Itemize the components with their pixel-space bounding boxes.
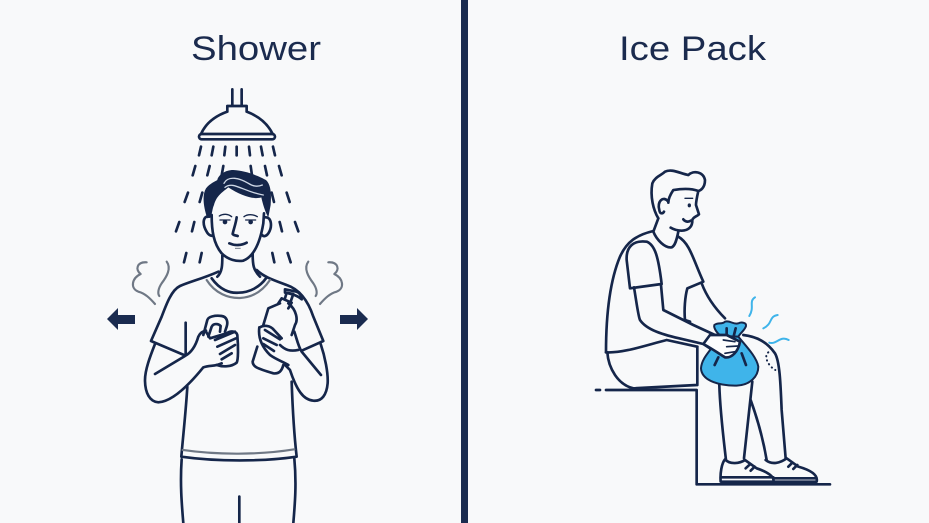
shoes — [721, 458, 817, 482]
ice bag — [701, 337, 758, 386]
cold sparkle lines — [749, 297, 789, 343]
head and hair — [204, 170, 271, 277]
arrow: left — [107, 308, 135, 330]
torso and sleeve — [606, 231, 725, 352]
head — [606, 171, 725, 352]
bench — [596, 390, 830, 484]
steam: right — [306, 262, 342, 304]
shirt hem and arm — [606, 285, 722, 356]
arms — [145, 331, 328, 402]
icon: shower head — [199, 89, 275, 139]
bottle and right hand — [253, 289, 302, 373]
knee dots — [766, 352, 775, 370]
steam: left — [133, 262, 169, 304]
man with soap and bottle — [145, 170, 328, 523]
hand on bag — [703, 335, 740, 357]
title: Shower: Shower — [191, 30, 321, 68]
title: Ice Pack: Ice Pack — [619, 30, 767, 68]
arrow: right — [340, 308, 368, 330]
man seated with ice pack — [596, 171, 830, 484]
legs — [607, 335, 786, 460]
divider bar — [461, 0, 468, 523]
t-shirt — [151, 270, 323, 460]
soap and left hand — [203, 316, 238, 366]
trousers — [181, 458, 295, 523]
water drops — [176, 147, 298, 262]
